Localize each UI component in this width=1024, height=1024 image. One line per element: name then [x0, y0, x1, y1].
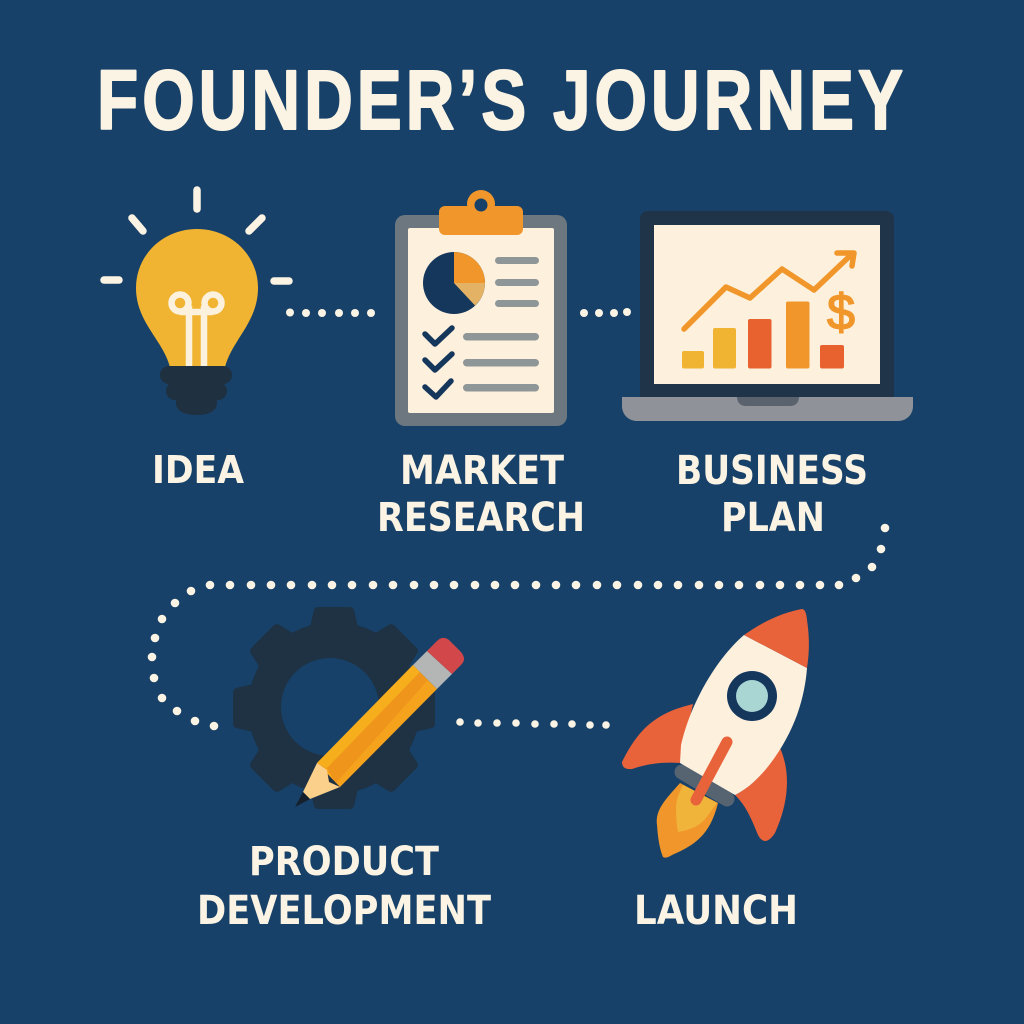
text: PLAN — [721, 495, 825, 541]
icon: pencil — [295, 638, 464, 807]
label: launch: LAUNCH — [634, 888, 798, 934]
label: idea: IDEA — [152, 448, 245, 492]
icon: light bulb — [104, 190, 289, 415]
icon: gear and pencil — [233, 607, 464, 809]
text: DEVELOPMENT — [197, 888, 492, 934]
icon: laptop with growth chart — [622, 211, 913, 421]
icon: rocket — [622, 609, 809, 858]
connector: idea to market research — [286, 308, 375, 317]
icon: laptop with growth chart: $ — [827, 284, 855, 340]
icon: gear — [233, 607, 435, 809]
icon: clipboard — [395, 190, 567, 426]
label: market research: MARKET — [400, 448, 565, 494]
connector: business plan to product development — [148, 524, 889, 730]
text: RESEARCH — [377, 495, 585, 541]
connector: product development to launch — [456, 718, 610, 729]
label: business plan: BUSINESS — [676, 448, 868, 494]
label: product development: PRODUCT — [249, 839, 440, 885]
connector: market research to business plan — [580, 308, 631, 317]
